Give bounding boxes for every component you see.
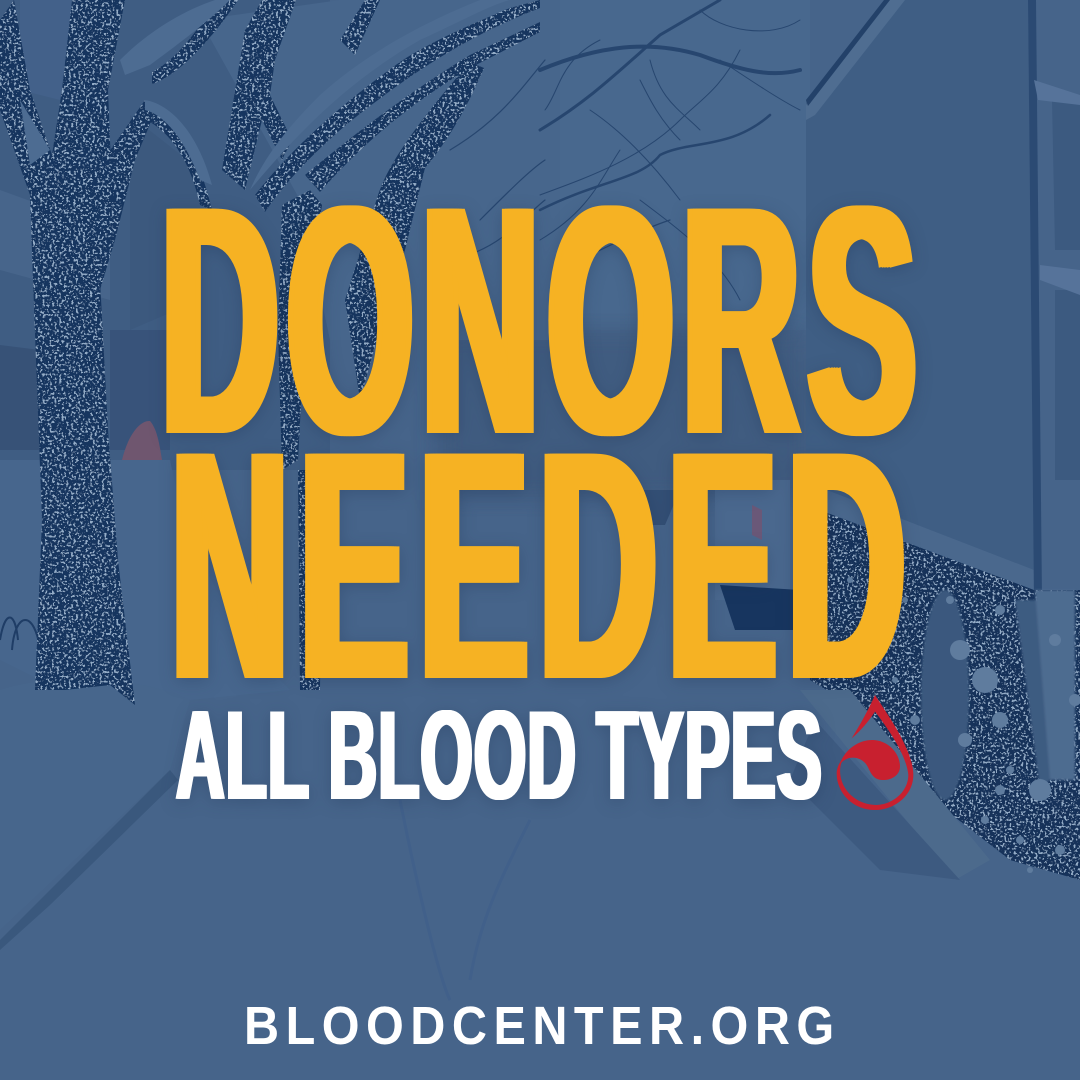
snow flakes xyxy=(847,577,1080,873)
car on street xyxy=(715,480,790,600)
snow-laden branches underside xyxy=(152,0,238,84)
left curb line xyxy=(0,770,178,950)
snow bank left xyxy=(0,460,120,690)
headline line 1: DONORS xyxy=(161,139,924,503)
main trunk xyxy=(0,0,135,705)
truck undercarriage xyxy=(806,505,1080,880)
right tree trunk xyxy=(345,62,484,400)
rear wheel xyxy=(921,590,1075,800)
truck box xyxy=(806,0,1034,570)
truck rear frame xyxy=(1028,0,1080,600)
left buildings xyxy=(0,0,330,470)
thin branches xyxy=(450,0,800,300)
subheading: all blood types: ALL BLOOD TYPES xyxy=(176,684,823,826)
person in red coat xyxy=(122,421,163,466)
icon: red blood drop logo xyxy=(836,695,914,810)
curb xyxy=(800,690,990,880)
snow caps on branches xyxy=(20,0,510,190)
website url: BLOODCENTER.ORG xyxy=(244,996,841,1056)
road tracks xyxy=(400,800,530,1000)
truck lower rail xyxy=(806,482,1034,590)
fence xyxy=(0,618,40,650)
center-left trunks xyxy=(222,0,296,190)
upper sky between trees xyxy=(200,0,560,340)
headline line 2: NEEDED xyxy=(171,384,916,748)
trees xyxy=(0,0,540,705)
distance haze xyxy=(430,0,810,330)
